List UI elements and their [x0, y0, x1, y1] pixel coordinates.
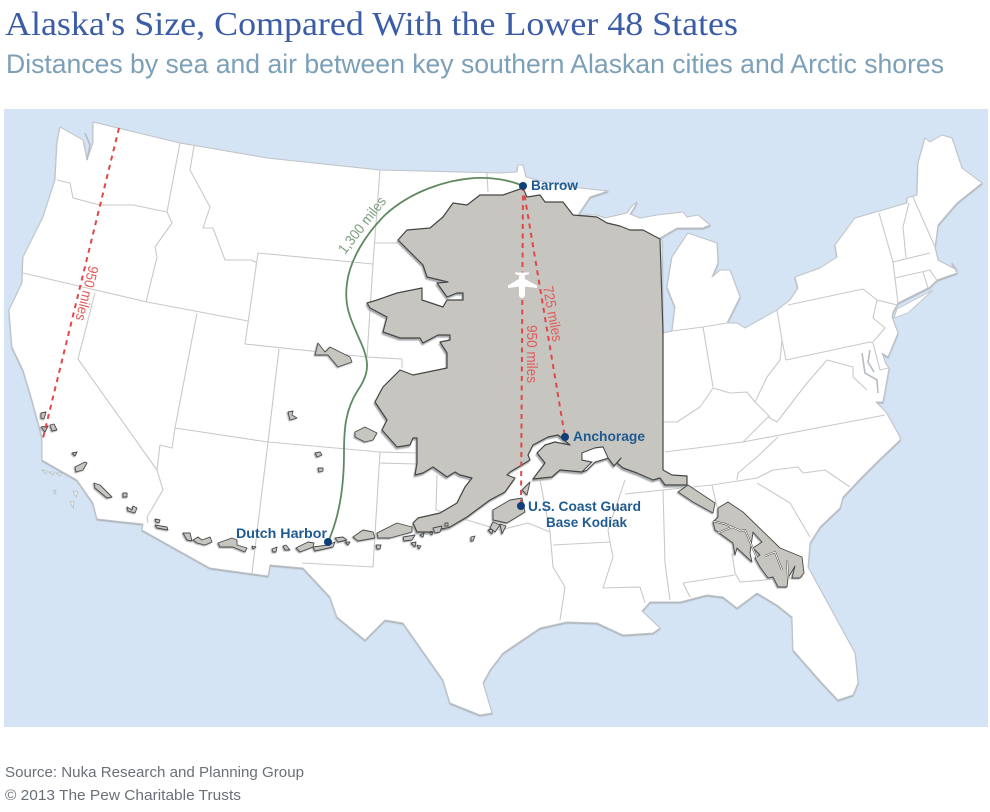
label: U.S. Coast Guard Base Kodiak: U.S. Coast Guard	[528, 499, 641, 514]
lower 48 states landmass	[9, 122, 982, 715]
title: Alaska's Size, Compared With the Lower 48 States	[5, 6, 738, 43]
city dot: Anchorage	[561, 433, 569, 441]
chesapeake bay and puget sound detail	[85, 133, 878, 393]
route: Dutch Harbor to Barrow	[328, 178, 523, 542]
label: Dutch Harbor: Dutch Harbor	[236, 526, 328, 541]
city dot: Kodiak	[517, 502, 525, 510]
route: Barrow to Kodiak	[521, 186, 523, 506]
state borders	[23, 143, 938, 620]
distance label: west 950 miles: 950 miles	[72, 264, 101, 322]
icon: airplane	[508, 272, 537, 298]
copyright: © 2013 The Pew Charitable Trusts	[5, 787, 241, 804]
route: 950 miles west coast reference	[43, 128, 119, 438]
subtitle: Distances by sea and air between key southern Alaskan cities and Arctic shores	[6, 49, 944, 79]
distance label: 1,300 miles: 1,300 miles	[336, 194, 390, 257]
alaska southeast panhandle and islands	[41, 343, 804, 587]
ocean background	[4, 109, 988, 727]
distance label: 725 miles: 725 miles	[539, 285, 565, 343]
distance label: 950 miles: 950 miles	[523, 325, 539, 383]
prince william sound	[582, 447, 608, 472]
alaska mainland	[367, 188, 687, 532]
city dot: Barrow	[519, 182, 527, 190]
panel: map	[4, 109, 988, 727]
route: Barrow to Anchorage	[523, 186, 565, 437]
city dot: Dutch Harbor	[324, 538, 332, 546]
label: Anchorage: Anchorage	[573, 429, 645, 444]
label: U.S. Coast Guard Base Kodiak: Base Kodiak	[546, 515, 627, 530]
channel islands specks	[42, 470, 78, 508]
panhandle channels outline	[713, 521, 788, 578]
label: Barrow: Barrow	[531, 178, 579, 193]
source note: Source: Nuka Research and Planning Group	[5, 764, 304, 781]
long island	[894, 290, 933, 318]
panhandle channels water	[713, 521, 788, 578]
label: U.S. Coast Guard Base Kodiak	[528, 499, 641, 530]
